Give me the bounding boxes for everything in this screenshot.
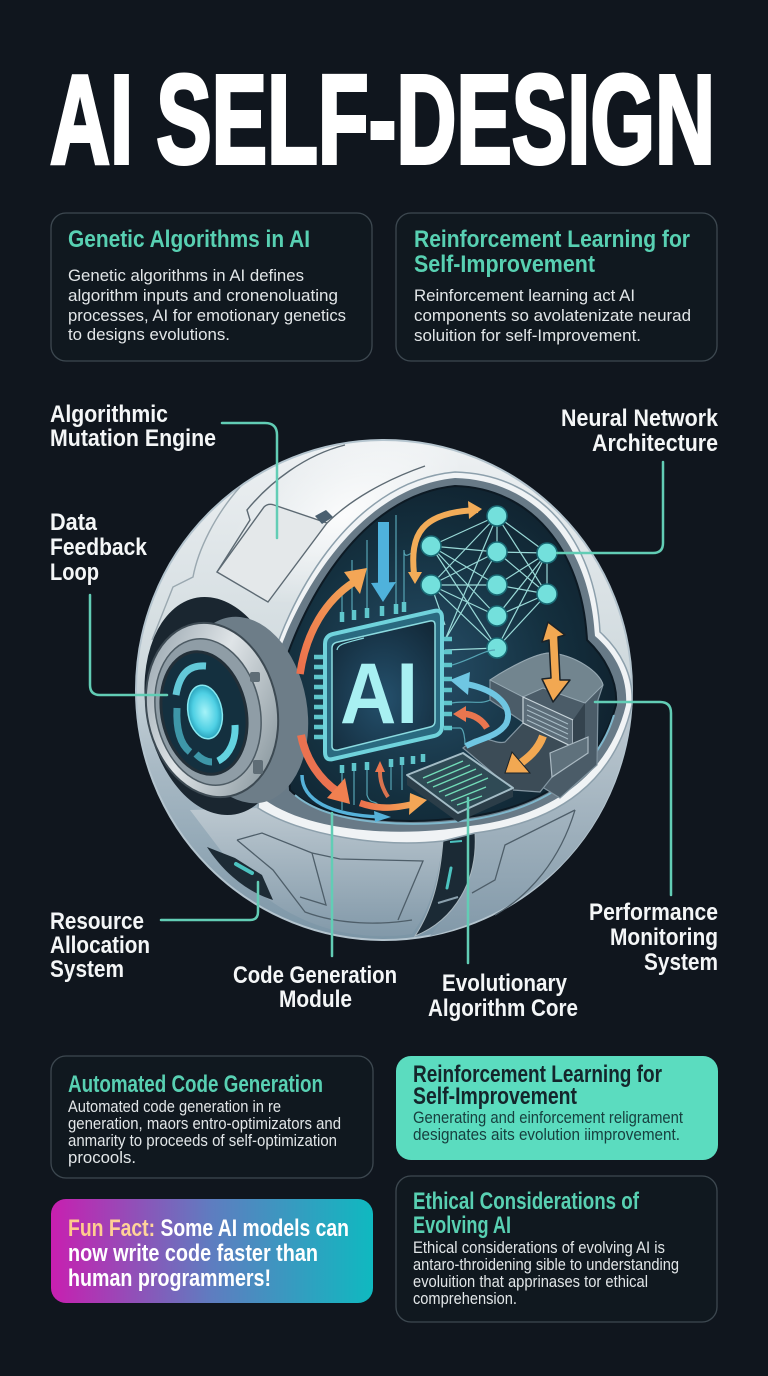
panel: genetic algorithms xyxy=(51,213,372,361)
text block: automated code generation: anmarity to proceeds of self-optimization xyxy=(68,1131,337,1150)
heading: ethical considerations: Evolving AI xyxy=(413,1212,511,1239)
text block: automated code generation: procools. xyxy=(68,1148,136,1167)
eye segments xyxy=(176,666,235,762)
chip label: AI xyxy=(340,646,418,742)
label: data feedback loop: Feedback xyxy=(50,534,148,561)
heading: reinforcement learning highlighted xyxy=(413,1061,662,1110)
label: resource allocation system: Resource xyxy=(50,908,144,935)
heading: reinforcement learning top xyxy=(414,226,690,278)
label: algorithmic mutation engine: Algorithmic xyxy=(50,401,168,428)
text block: automated code generation xyxy=(68,1097,341,1167)
text block: automated code generation: generation, maors entro-optimizators and xyxy=(68,1114,341,1133)
fun fact text: now write code faster than xyxy=(68,1240,318,1267)
panel: fun fact xyxy=(51,1199,373,1303)
lower hull plating xyxy=(190,717,630,936)
central illustration: AI sphere xyxy=(128,389,632,940)
bolts xyxy=(250,672,260,682)
chip pins xyxy=(314,602,452,773)
text block: reinforcement learning highlighted xyxy=(413,1108,683,1144)
label: algorithmic mutation engine: Mutation Engine xyxy=(50,425,216,452)
label: neural network architecture: Architecture xyxy=(592,430,718,457)
arrow: orange up left arc xyxy=(300,568,367,674)
code document xyxy=(407,753,513,822)
upper shell highlight xyxy=(288,468,410,579)
label: data feedback loop: Loop xyxy=(50,559,99,586)
arrow: small up xyxy=(375,761,388,797)
circuit traces xyxy=(342,515,495,810)
arrow: small red xyxy=(453,706,487,728)
text block: ethical considerations: Ethical considerations of evolving AI is xyxy=(413,1238,665,1257)
panel: reinforcement learning highlighted xyxy=(396,1056,718,1160)
sensor slot xyxy=(207,847,273,900)
fun fact text xyxy=(68,1215,349,1292)
text block: ethical considerations: evoluition that apprinases tor ethical xyxy=(413,1272,648,1291)
heading: genetic algorithms: Genetic Algorithms in AI xyxy=(68,226,310,253)
heading: automated code generation: Automated Code Generation xyxy=(68,1071,323,1098)
arrow: top orange loop xyxy=(408,501,482,584)
text block: genetic algorithms xyxy=(68,266,346,344)
panel: reinforcement learning top xyxy=(396,213,717,361)
text block: reinforcement learning top: soluition for self-Improvement. xyxy=(414,326,641,345)
text block: genetic algorithms: Genetic algorithms in AI defines xyxy=(68,266,304,285)
AI chip xyxy=(325,611,442,759)
heading: reinforcement learning highlighted: Reinforcement Learning for xyxy=(413,1061,662,1088)
arrow: orange to document xyxy=(505,736,543,773)
eye lens xyxy=(130,610,294,810)
heading: ethical considerations: Ethical Considerations of xyxy=(413,1188,640,1215)
label: data feedback loop xyxy=(50,509,167,695)
text block: automated code generation: Automated code generation in re xyxy=(68,1097,281,1116)
text block: reinforcement learning top: components so avolatenizate neurad xyxy=(414,306,691,325)
heading: reinforcement learning top: Self-Improvement xyxy=(414,251,595,278)
text block: ethical considerations: comprehension. xyxy=(413,1289,517,1308)
arrow: blue down xyxy=(371,522,396,602)
label: evolutionary algorithm core: Algorithm Core xyxy=(428,995,578,1022)
arrow: lower orange xyxy=(360,793,427,815)
panel: ethical considerations xyxy=(396,1176,717,1322)
label: neural network architecture: Neural Network xyxy=(561,405,719,432)
interior cavity xyxy=(282,486,616,821)
label: performance monitoring system: Performance xyxy=(589,899,718,926)
label: performance monitoring system xyxy=(589,702,718,976)
text block: genetic algorithms: processes, AI for emotionary genetics xyxy=(68,306,346,325)
tag on upper shell xyxy=(315,510,333,524)
fun fact text: Fun Fact: Some AI models can xyxy=(68,1215,349,1242)
label: performance monitoring system: Monitoring xyxy=(610,924,718,951)
label: code generation module: Code Generation xyxy=(233,962,397,989)
text block: reinforcement learning highlighted: Generating and einforcement religrament xyxy=(413,1108,683,1127)
text block: reinforcement learning top: Reinforcement learning act AI xyxy=(414,286,635,305)
text block: reinforcement learning highlighted: designates aits evolution iimprovement. xyxy=(413,1125,680,1144)
panel: automated code generation xyxy=(51,1056,373,1178)
label: code generation module: Module xyxy=(279,986,352,1013)
label: algorithmic mutation engine xyxy=(50,401,277,538)
label: data feedback loop: Data xyxy=(50,509,98,536)
text block: genetic algorithms: to designs evolutions. xyxy=(68,325,230,344)
label: resource allocation system xyxy=(50,882,258,983)
bottom rim highlight xyxy=(295,715,614,824)
heading: reinforcement learning highlighted: Self-Improvement xyxy=(413,1083,577,1110)
heading: reinforcement learning top: Reinforcement Learning for xyxy=(414,226,690,253)
server boxes xyxy=(463,653,603,798)
hull slot xyxy=(415,833,475,936)
sphere shell xyxy=(136,440,632,940)
arrow: blue curved xyxy=(450,672,508,746)
label: performance monitoring system: System xyxy=(644,949,718,976)
fun fact text: human programmers! xyxy=(68,1265,271,1292)
label: resource allocation system: Allocation xyxy=(50,932,150,959)
text block: ethical considerations: antaro-throidening sible to understanding xyxy=(413,1255,679,1274)
text block: ethical considerations xyxy=(413,1238,679,1308)
label: code generation module xyxy=(233,813,397,1013)
label: evolutionary algorithm core xyxy=(428,798,578,1022)
heading: ethical considerations xyxy=(413,1188,640,1239)
arrow: orange vertical double xyxy=(542,622,570,702)
label: evolutionary algorithm core: Evolutionary xyxy=(442,970,568,997)
eye glow xyxy=(184,682,226,742)
label: resource allocation system: System xyxy=(50,956,124,983)
interior rim xyxy=(258,472,632,843)
arrow: blue lower arc xyxy=(302,775,391,822)
text block: reinforcement learning top xyxy=(414,286,691,345)
arrow: lower red arc xyxy=(301,735,350,804)
eye socket xyxy=(128,586,304,826)
upper shell plating xyxy=(152,445,425,640)
label: neural network architecture xyxy=(557,405,719,553)
text block: genetic algorithms: algorithm inputs and cronenoluating xyxy=(68,286,338,305)
neural network xyxy=(421,506,557,658)
